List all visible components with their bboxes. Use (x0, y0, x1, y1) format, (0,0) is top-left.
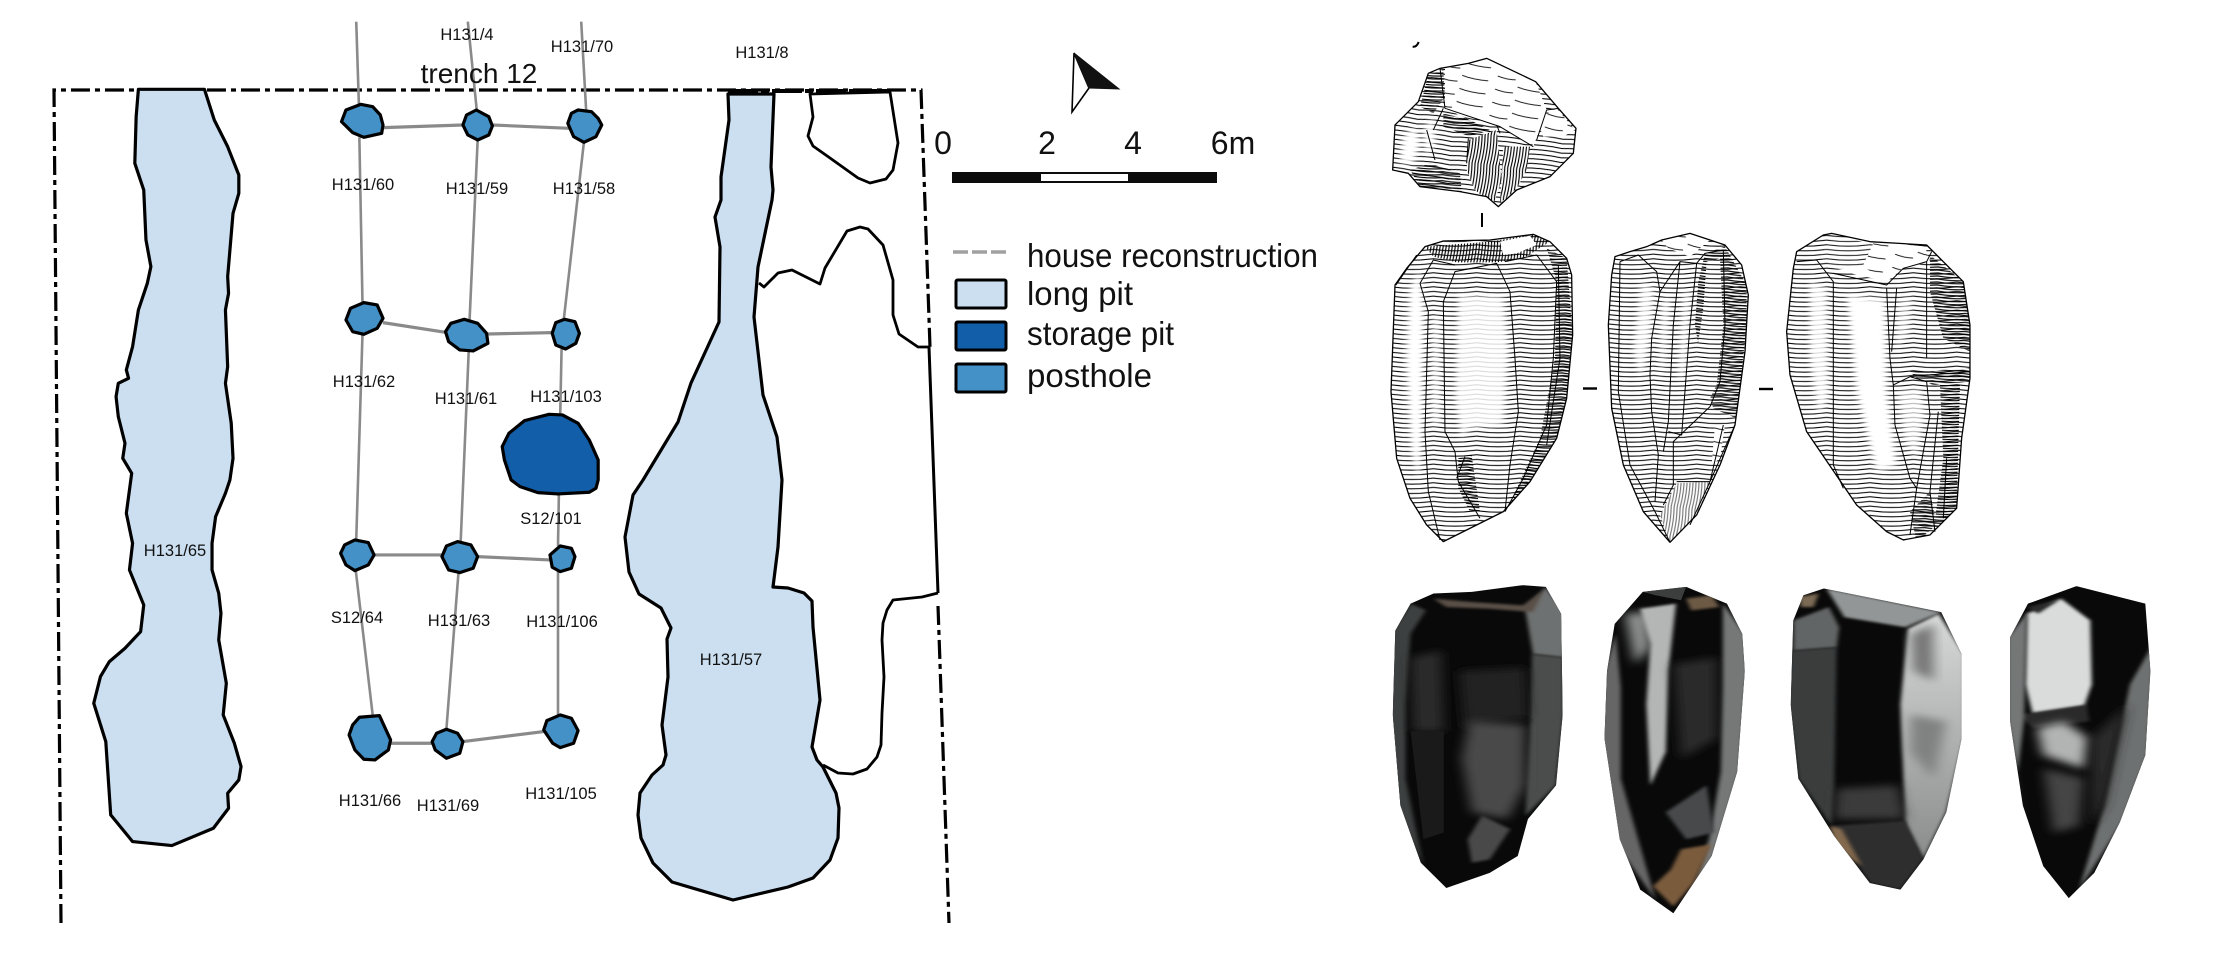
feature labels: H131/63 (428, 612, 490, 630)
feature labels: S12/101 (520, 510, 582, 528)
scale bar (934, 125, 1255, 183)
feature labels: H131/60 (332, 176, 394, 194)
feature labels: H131/58 (553, 180, 615, 198)
legend: long pit (956, 275, 1133, 312)
unexcavated outlines (759, 92, 938, 774)
feature labels: S12/64 (331, 609, 383, 627)
trench label: trench 12 (421, 58, 537, 89)
feature labels: H131/105 (525, 785, 597, 803)
scale bar: 6m (1211, 125, 1255, 161)
photo: core view 4 (2008, 583, 2153, 900)
legend: storage pit (956, 315, 1174, 352)
panel: core line drawings (1390, 42, 1973, 545)
scale bar: 2 (1038, 125, 1056, 161)
legend: posthole: posthole (1027, 357, 1152, 394)
feature labels: H131/59 (446, 180, 508, 198)
house reconstruction lines and postholes (341, 22, 602, 760)
feature labels: H131/57 (700, 651, 762, 669)
long pit H131/65 (94, 89, 241, 846)
photo: core view 3 (1788, 585, 1964, 891)
panel: core photographs (1388, 583, 2153, 917)
drawing: core face C (1783, 232, 1973, 545)
photo: core view 1 (1388, 583, 1566, 890)
drawing: core face A (1390, 232, 1577, 545)
feature labels: H131/66 (339, 792, 401, 810)
feature labels: H131/106 (526, 613, 598, 631)
legend: storage pit: storage pit (1027, 315, 1174, 352)
scale bar: 0 (934, 125, 952, 161)
feature labels: H131/62 (333, 373, 395, 391)
legend: house reconstruction: house reconstruction (1027, 237, 1318, 274)
feature labels: H131/4 (440, 26, 494, 44)
cores B and C (1607, 232, 1973, 545)
icon: north arrow (1072, 53, 1119, 112)
view separator (1583, 387, 1597, 390)
feature labels: H131/8 (735, 44, 789, 62)
storage pit (502, 414, 598, 494)
long pit H131/57 (625, 94, 839, 900)
photo: core view 2 (1600, 583, 1747, 917)
feature labels: H131/103 (530, 388, 602, 406)
feature labels: H131/70 (551, 38, 613, 56)
panel: site plan (54, 22, 949, 923)
scale bar: 4 (1124, 125, 1142, 161)
drawing: core platform view (1390, 42, 1580, 210)
view separator (1759, 388, 1773, 390)
legend (953, 237, 1318, 394)
postholes (341, 104, 602, 760)
feature labels: H131/61 (435, 390, 497, 408)
legend: long pit: long pit (1027, 275, 1133, 312)
feature labels: H131/65 (144, 542, 206, 560)
excavation frame, trench boundary (54, 90, 949, 923)
drawing: core face B (1607, 232, 1753, 545)
feature labels: H131/69 (417, 797, 479, 815)
connector tick (1481, 213, 1483, 227)
feature labels (144, 26, 789, 815)
legend: posthole (956, 357, 1152, 394)
